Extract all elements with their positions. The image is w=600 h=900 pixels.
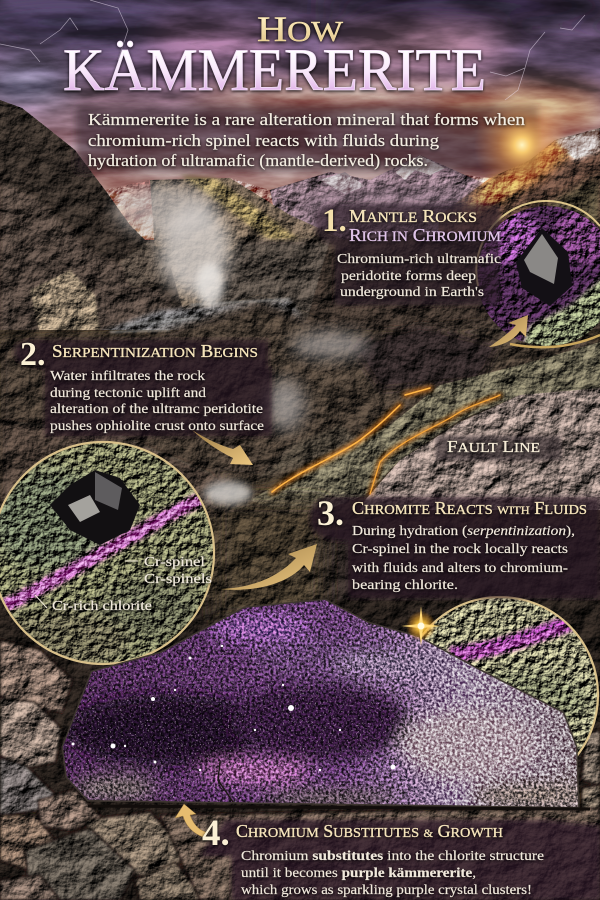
- circle inset: Mantle rock close-up: [475, 200, 600, 348]
- step 2 heading: SERPENTINIZATION BEGINS: [52, 341, 258, 361]
- step 1 backing: [315, 204, 500, 305]
- intro text: [88, 110, 525, 170]
- step 2 body: Water infiltrates the rock: [50, 369, 205, 384]
- step 2 body: pushes ophiolite crust onto surface: [50, 419, 264, 434]
- step 4 body: until it becomes purple kämmererite ,: [241, 866, 476, 881]
- arrow: step 3: [220, 544, 317, 590]
- right slab rocks: [250, 342, 600, 520]
- step 3 body: Cr-spinel in the rock locally reacts: [352, 542, 568, 557]
- panel: step 4: [200, 813, 600, 900]
- inset gold ring: [0, 442, 214, 664]
- label: Cr-spinel: [125, 555, 205, 570]
- inset fill: [422, 598, 597, 753]
- step 4 body: [241, 849, 544, 898]
- title line: Kämmererite: KÄMMERERITE: [63, 37, 486, 103]
- fault line glow: [272, 388, 500, 494]
- mid foreground rock: [0, 330, 600, 530]
- step 4 number: 4.: [202, 813, 230, 854]
- label: Cr-rich chlorite: Cr-rich chlorite: [52, 599, 152, 614]
- step 4 body: which grows as sparkling purple crystal clusters!: [241, 883, 532, 898]
- step 3 heading: CHROMITE REACTS WITH FLUIDS: [352, 498, 587, 518]
- title: [63, 9, 486, 103]
- storm clouds: [0, 0, 600, 136]
- step 1 heading: RICH IN CHROMIUM: [349, 225, 501, 245]
- black spinel crystal: [516, 228, 572, 306]
- step 3 backing: [310, 497, 600, 598]
- water highlights: [110, 299, 290, 332]
- inset fill: [0, 440, 220, 670]
- intro text: Kämmererite is a rare alteration mineral that forms when: [88, 110, 525, 129]
- inset gold ring: [402, 597, 598, 793]
- boulders: [0, 640, 600, 900]
- step 1 body: peridotite forms deep: [341, 269, 476, 284]
- step 4 body: Chromium substitutes into the chlorite structure: [241, 849, 544, 864]
- crystal colour zones: [60, 600, 590, 810]
- step 3 body: with fluids and alters to chromium-: [352, 561, 568, 576]
- step 1 body: [337, 252, 501, 300]
- large kämmererite crystal specimen: [60, 600, 590, 810]
- step 2 body: alteration of the ultramc peridotite: [50, 402, 263, 417]
- specimen base crack: [218, 762, 235, 805]
- right mountains: [430, 128, 600, 300]
- panel: step 1: [315, 203, 501, 305]
- step 1 body: Chromium-rich ultramafic: [337, 252, 501, 267]
- fault line backing: [436, 436, 561, 460]
- label: Cr-rich chlorite: [35, 595, 152, 614]
- icon: sun glow: [474, 97, 570, 193]
- step 2 body: during tectonic uplift and: [50, 386, 206, 401]
- step 4 backing: [200, 820, 600, 900]
- arrow: step 2: [192, 430, 253, 465]
- distant mountains: [270, 155, 500, 240]
- arrow: step 4: [175, 804, 206, 838]
- inset labels: [35, 555, 212, 614]
- inset gold ring: [476, 201, 600, 286]
- step 2 number: 2.: [20, 336, 46, 373]
- panel: step 3: [310, 493, 600, 598]
- circle inset: vein close-up: [0, 440, 220, 670]
- icon: starburst sparkle: [401, 606, 441, 646]
- step 3 body: bearing chlorite.: [352, 578, 458, 593]
- step 1 number: 1.: [322, 203, 347, 239]
- specimen shadow edge: [88, 806, 590, 809]
- intro text: hydration of ultramafic (mantle-derived) rocks.: [88, 151, 428, 170]
- step 2 body: [50, 369, 264, 434]
- step 1 body: underground in Earth's: [340, 285, 484, 300]
- intro backing: [76, 106, 538, 172]
- waterfall mist: [115, 184, 370, 505]
- panel: introduction: [76, 97, 570, 193]
- left rock mass: [0, 100, 190, 340]
- fault line text: FAULT LINE: [447, 437, 540, 456]
- label: Cr-spinels: Cr-spinels: [144, 572, 212, 587]
- sky: [0, 0, 600, 240]
- circle inset: kämmererite vein: [422, 596, 600, 756]
- step 4 heading: CHROMIUM SUBSTITUTES & GROWTH: [236, 821, 503, 841]
- lightning: [0, 0, 585, 100]
- step 3 body: During hydration ( serpentinization ),: [352, 524, 575, 539]
- step 3 body: [352, 524, 575, 593]
- step 1 heading: [349, 206, 501, 245]
- step 3 number: 3.: [317, 493, 344, 533]
- panel: step 2: [14, 336, 272, 436]
- cloud streaks: [0, 0, 600, 240]
- step 2 backing: [14, 340, 272, 436]
- valley haze: [295, 183, 485, 227]
- step 1 heading: MANTLE ROCKS: [349, 206, 477, 226]
- intro text: chromium-rich spinel reacts with fluids during: [88, 131, 439, 150]
- middle valley: [150, 178, 370, 320]
- river: [100, 300, 305, 340]
- sparkles: [72, 645, 431, 771]
- inset fill: [478, 206, 600, 346]
- bottom ground: [0, 600, 600, 900]
- arrow: step 1: [489, 315, 528, 347]
- label: Cr-spinel: Cr-spinel: [144, 555, 205, 570]
- specimen rock body: [63, 600, 578, 807]
- title line: How: HOW: [257, 9, 344, 49]
- black spinel crystal: [50, 470, 140, 545]
- label: fault line: [436, 436, 561, 460]
